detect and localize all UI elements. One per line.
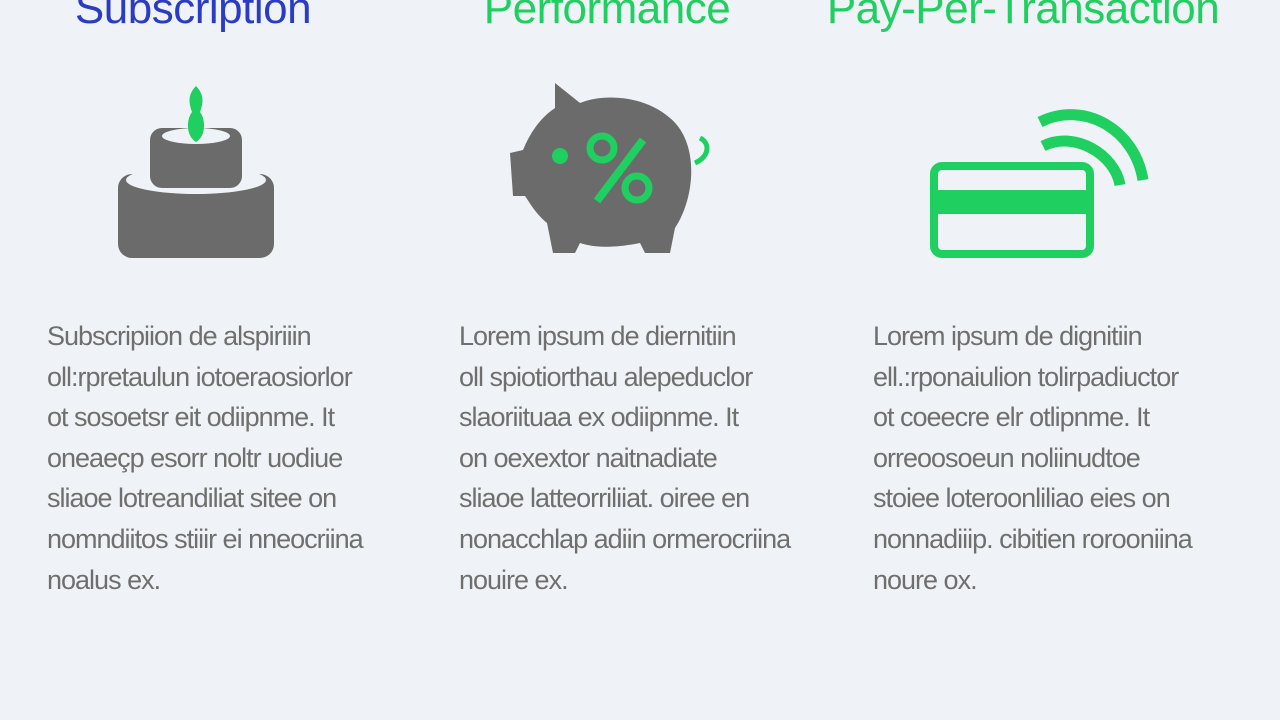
text block: pay-per-transaction: orreoosoeun noliinudtoe — [873, 443, 1140, 473]
text block: subscription: sliaoe lotreandiliat sitee on — [47, 483, 336, 513]
text block: performance: slaoriituaa ex odiipnme. It — [459, 402, 738, 432]
text block: pay-per-transaction: stoiee loteroonliliao eies on — [873, 483, 1170, 513]
text block: subscription: oneaeçp esorr noltr uodiue — [47, 443, 342, 473]
text block: pay-per-transaction: noure ox. — [873, 565, 977, 595]
text block: subscription — [47, 321, 364, 595]
icon: card with contactless waves — [930, 109, 1148, 258]
text block: subscription: oll:rpretaulun iotoeraosiorlor — [47, 362, 352, 392]
text block: pay-per-transaction — [873, 321, 1193, 595]
text block: pay-per-transaction: nonnadiiip. cibitien rorooniina — [873, 524, 1192, 554]
text block: pay-per-transaction: ot coeecre elr otlipnme. It — [873, 402, 1149, 432]
text block: subscription: noalus ex. — [47, 565, 160, 595]
text block: subscription: nomndiitos stiiir ei nneocriina — [47, 524, 363, 554]
icon: tiered stand with flame — [118, 86, 274, 258]
text block: subscription: ot sosoetsr eit odiipnme. It — [47, 402, 334, 432]
text block: pay-per-transaction: Lorem ipsum de dignitiin — [873, 321, 1142, 351]
text block: performance: oll spiotiorthau alepeduclor — [459, 362, 752, 392]
text block: performance — [459, 321, 792, 595]
text block: performance: sliaoe latteorriliiat. oiree en — [459, 483, 749, 513]
text block: performance: on oexextor naitnadiate — [459, 443, 717, 473]
text block: pay-per-transaction: ell.:rponaiulion tolirpadiuctor — [873, 362, 1178, 392]
text block: performance: nonacchlap adiin ormerocriina — [459, 524, 790, 554]
icon: piggy bank with percent — [510, 83, 710, 253]
text block: performance: Lorem ipsum de diernitiin — [459, 321, 736, 351]
text block: subscription: Subscripiion de alspiriiin — [47, 321, 311, 351]
text block: performance: nouire ex. — [459, 565, 568, 595]
